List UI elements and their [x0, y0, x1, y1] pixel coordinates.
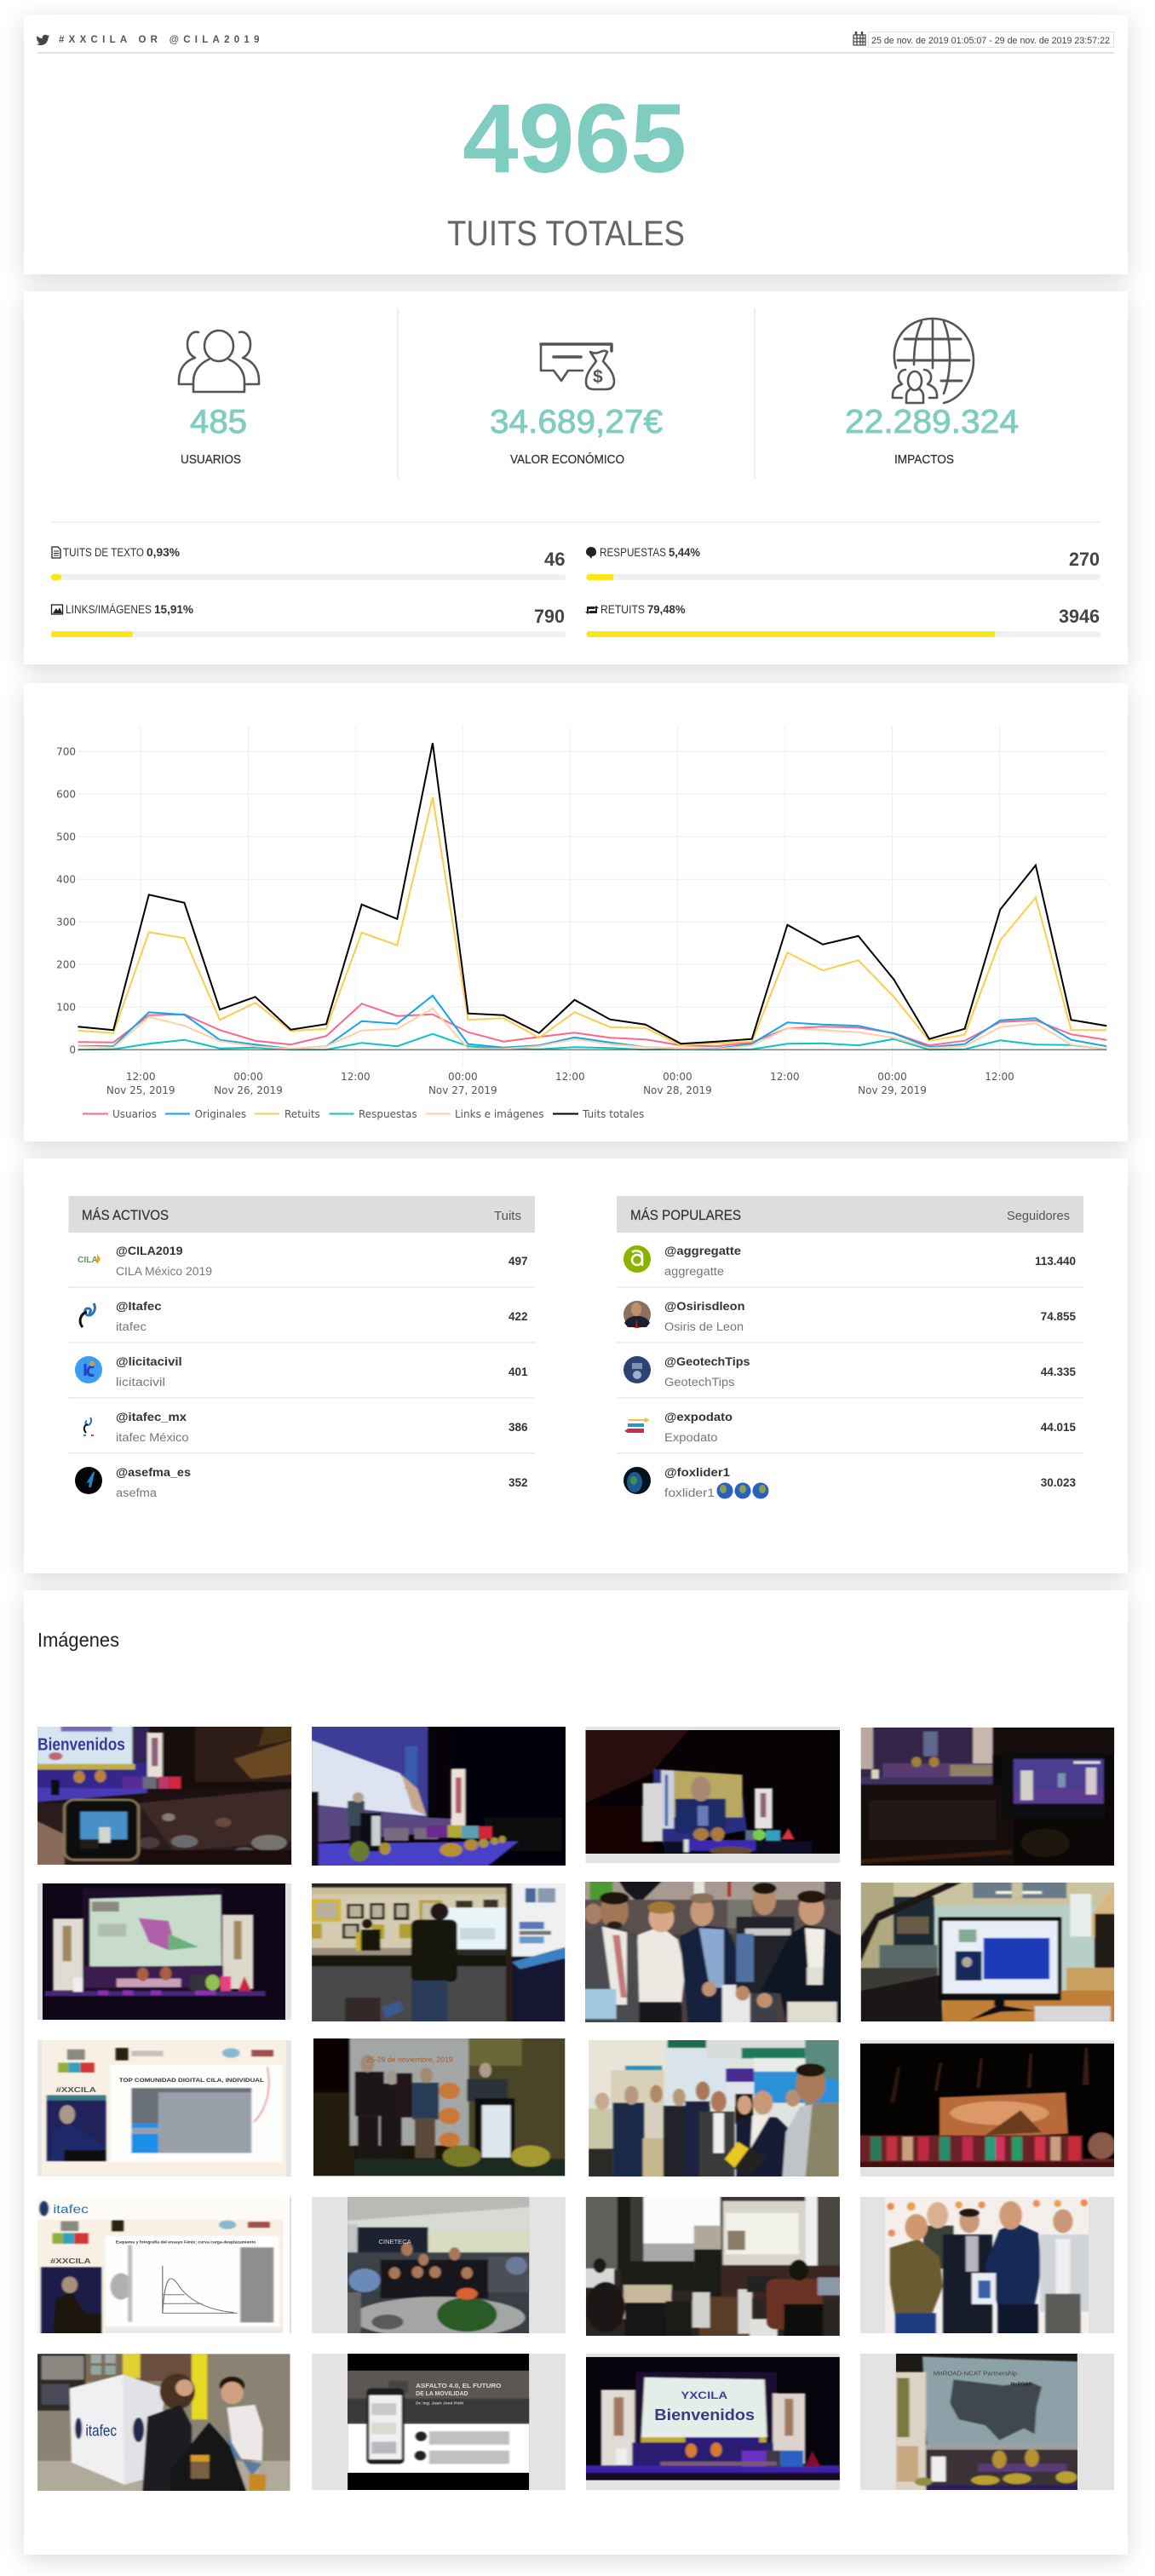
row: Itafec: itafec [116, 1320, 147, 1333]
total tweets label: TUITS TOTALES [447, 213, 685, 253]
KPI: users label: USUARIOS [181, 452, 241, 467]
date range box [869, 32, 1114, 48]
row: expodato: @expodato [664, 1411, 733, 1423]
table header: most active: Tuits [494, 1209, 521, 1223]
row: asefma_es [75, 1466, 528, 1499]
photo: welcome screen on stage: Bienvenidos [654, 2406, 755, 2424]
row: GeotechTips [623, 1355, 1076, 1389]
icon: globe with users [893, 319, 974, 403]
series: Respuestas [78, 1034, 1106, 1049]
photo: asphalt 4.0 slide: Dr. Ing. Juan José Potti [416, 2401, 464, 2406]
photo: asphalt 4.0 slide: DE LA MOVILIDAD [416, 2390, 468, 2397]
photo: monitor with slide [860, 1883, 1114, 2021]
y axis labels: 0 [69, 1044, 76, 1056]
x axis labels: 00:00 [877, 1071, 907, 1083]
icon: message with money bag: $ [593, 367, 603, 387]
y axis labels: 700 [56, 746, 76, 758]
row: Itafec [75, 1300, 528, 1333]
hashtag query: #XXCILA OR @CILA2019 [59, 35, 260, 45]
bar: retweets: 3946 [1059, 606, 1100, 627]
photo: banquet under tent [312, 2197, 566, 2333]
photo: conference room projection [586, 2197, 840, 2336]
bar: links and images [51, 603, 566, 637]
row: CILA2019: @CILA2019 [116, 1245, 182, 1257]
row: itafec_mx: 386 [509, 1421, 528, 1434]
row: itafec_mx: @itafec_mx [116, 1411, 187, 1423]
y axis labels: 300 [56, 917, 76, 929]
row: licitacivil: licitacivil [116, 1376, 165, 1389]
x axis labels: Nov 29, 2019 [858, 1084, 927, 1096]
icon: message with money bag [541, 344, 614, 389]
row: aggregatte: @aggregatte [664, 1245, 742, 1257]
row: CILA2019: CILA [78, 1256, 98, 1265]
KPI: users value: 485 [190, 404, 247, 440]
line chart series [78, 743, 1106, 1049]
photo: asphalt 4.0 slide [312, 2354, 566, 2490]
photo: auditorium with camera: Bienvenidos [37, 1734, 125, 1754]
total tweets number: 4965 [463, 84, 687, 193]
x axis labels: Nov 26, 2019 [214, 1084, 283, 1096]
x axis labels: Nov 25, 2019 [106, 1084, 175, 1096]
panel: timeline chart [24, 683, 1128, 1141]
table header: most popular: Seguidores [1007, 1209, 1070, 1223]
panel: header with total tweets [24, 14, 1128, 274]
x axis labels: 12:00 [555, 1071, 585, 1083]
bar: text tweets: 46 [544, 549, 566, 570]
bar: text tweets: 0,93% [147, 546, 180, 559]
photo: women next to itafec cube [37, 2354, 290, 2491]
chart legend [83, 1108, 644, 1120]
bar: links and images: LINKS/IMÁGENES [66, 603, 152, 616]
KPI: economic value: 34.689,27€ [490, 404, 663, 440]
photo: digital community ranking slide: #XXCILA [56, 2086, 96, 2094]
photo: women next to itafec cube: itafec [85, 2422, 117, 2440]
table header: most popular: MÁS POPULARES [630, 1207, 741, 1223]
row: CILA2019: CILA México 2019 [116, 1265, 212, 1278]
photo: slide with load curve [37, 2197, 291, 2333]
date range box: 25 de nov. de 2019 01:05:07 - 29 de nov. de 2019 23:57:22 [871, 36, 1110, 46]
x axis labels: 00:00 [663, 1071, 692, 1083]
bar: links and images: 15,91% [154, 603, 193, 616]
row: expodato [623, 1411, 1076, 1444]
icon: calendar [853, 32, 865, 45]
row: expodato: 44.015 [1041, 1421, 1076, 1434]
row: asefma_es: asefma [116, 1486, 158, 1499]
photo: map slide on stage [860, 2354, 1114, 2490]
series: Links e imágenes [78, 1009, 1106, 1049]
gallery heading: Imágenes [37, 1629, 119, 1651]
row: GeotechTips: @GeotechTips [664, 1355, 750, 1368]
photo: speaker on giant screen [586, 1727, 840, 1863]
row: foxlider1 [623, 1466, 1076, 1499]
photo: auditorium with camera [37, 1727, 291, 1865]
row: licitacivil: @licitacivil [116, 1355, 182, 1368]
x axis labels: 00:00 [233, 1071, 263, 1083]
table header: most active: MÁS ACTIVOS [82, 1207, 169, 1223]
series: Usuarios [78, 1003, 1106, 1046]
icon: twitter bird [37, 35, 49, 45]
photo: slide with load curve: #XXCILA [50, 2257, 91, 2265]
bar: retweets: 79,48% [647, 603, 685, 616]
bar: text tweets [51, 546, 566, 580]
photo: speakers at podium [313, 2038, 566, 2176]
row: GeotechTips: GeotechTips [664, 1376, 735, 1389]
x axis labels: Nov 28, 2019 [643, 1084, 712, 1096]
photo: slide with load curve: Esquema y fotografía del ensayo Fénix; curva carga-desplazamiento [116, 2240, 256, 2245]
chart legend: Links e imágenes [455, 1108, 543, 1120]
series: Tuits totales [78, 743, 1106, 1044]
row: GeotechTips: 44.335 [1041, 1366, 1076, 1378]
x axis labels: 12:00 [126, 1071, 155, 1083]
y axis labels: 600 [56, 789, 76, 801]
bar: retweets: RETUITS [600, 603, 645, 616]
table header: most popular [617, 1196, 1083, 1233]
photo: group of delegates [585, 1882, 841, 2022]
bar: replies: 5,44% [669, 546, 700, 559]
row: expodato: Expodato [664, 1431, 717, 1444]
icon: users [179, 331, 259, 392]
chart legend: Tuits totales [582, 1108, 644, 1120]
photo: speakers at podium: 25-29 de noviembre, 2019 [366, 2056, 453, 2063]
row: CILA2019: 497 [509, 1255, 528, 1268]
row: Osirisdleon: @Osirisdleon [664, 1300, 744, 1313]
photo: digital community ranking slide: TOP COMUNIDAD DIGITAL CILA, INDIVIDUAL [119, 2077, 264, 2084]
y axis labels: 100 [56, 1002, 76, 1014]
y axis labels: 500 [56, 831, 76, 843]
row: foxlider1: @foxlider1 [664, 1466, 731, 1479]
chart legend: Originales [194, 1108, 246, 1120]
row: Osirisdleon [623, 1300, 1076, 1333]
KPI: economic label: VALOR ECONÓMICO [510, 452, 624, 467]
row: itafec_mx [75, 1411, 528, 1444]
y axis labels [56, 746, 76, 1056]
row: asefma_es: 352 [509, 1476, 528, 1489]
row: aggregatte: 113.440 [1035, 1255, 1076, 1268]
series: Originales [78, 996, 1106, 1049]
chart legend: Respuestas [359, 1108, 417, 1120]
row: Osirisdleon: 74.855 [1041, 1310, 1076, 1323]
x axis labels: 12:00 [985, 1071, 1014, 1083]
KPI: impacts value: 22.289.324 [845, 404, 1019, 440]
row: itafec_mx: itafec México [116, 1431, 189, 1444]
y axis labels: 400 [56, 874, 76, 886]
photo: dark hall with side screen [860, 1728, 1114, 1866]
x axis labels [106, 1071, 1014, 1096]
bar: replies: RESPUESTAS [600, 546, 666, 559]
y axis labels: 200 [56, 959, 76, 971]
photo: speaker on stage [312, 1727, 566, 1866]
bar: text tweets: TUITS DE TEXTO [63, 546, 144, 559]
row: licitacivil: 401 [509, 1366, 528, 1378]
bar: replies: 270 [1069, 549, 1100, 570]
row: asefma_es: @asefma_es [116, 1466, 191, 1479]
x axis labels: 12:00 [341, 1071, 371, 1083]
row: CILA2019 [75, 1245, 528, 1278]
series: Retuits [78, 797, 1106, 1045]
photo: slide with load curve: itafec [53, 2203, 89, 2217]
bar: replies [586, 546, 1100, 580]
row: Itafec: 422 [509, 1310, 528, 1323]
row: aggregatte: aggregatte [664, 1265, 724, 1278]
photo: award group against logo wall [860, 2197, 1114, 2333]
chart legend: Usuarios [112, 1108, 157, 1120]
bar: retweets [585, 603, 1100, 637]
chart legend: Retuits [284, 1108, 320, 1120]
photo: slide with surface chart [37, 1883, 291, 2020]
panel: top users tables [24, 1159, 1128, 1573]
photo: banquet under tent: CINETECA [379, 2239, 411, 2245]
photo: welcome screen on stage [586, 2354, 840, 2490]
photo: map slide on stage: MnROAD-NCAT Partnership [934, 2370, 1017, 2378]
photo: asphalt 4.0 slide: ASFALTO 4.0, EL FUTURO [416, 2383, 501, 2389]
row: foxlider1: foxlider1 [664, 1486, 715, 1499]
photo: gallery wall with screen [312, 1883, 566, 2021]
row: licitacivil [75, 1355, 528, 1389]
table header: most active [68, 1196, 535, 1233]
panel: image gallery [24, 1590, 1128, 2555]
row: foxlider1: 30.023 [1041, 1476, 1076, 1489]
x axis labels: 12:00 [770, 1071, 800, 1083]
panel: KPIs and tweet type bars [24, 291, 1128, 664]
row: aggregatte [623, 1245, 1076, 1278]
x axis labels: 00:00 [448, 1071, 478, 1083]
x axis labels: Nov 27, 2019 [428, 1084, 497, 1096]
row: Osirisdleon: Osiris de Leon [664, 1320, 744, 1333]
row: Itafec: @Itafec [116, 1300, 162, 1313]
bar: links and images: 790 [534, 606, 565, 627]
photo: folk dancers on stage [860, 2040, 1114, 2176]
KPI: impacts label: IMPACTOS [894, 452, 954, 467]
photo: group at exhibition booth [589, 2040, 839, 2176]
photo: welcome screen on stage: YXCILA [681, 2389, 728, 2401]
photo: digital community ranking slide [37, 2040, 291, 2176]
photo: map slide on stage: MnROAD [1011, 2382, 1032, 2387]
